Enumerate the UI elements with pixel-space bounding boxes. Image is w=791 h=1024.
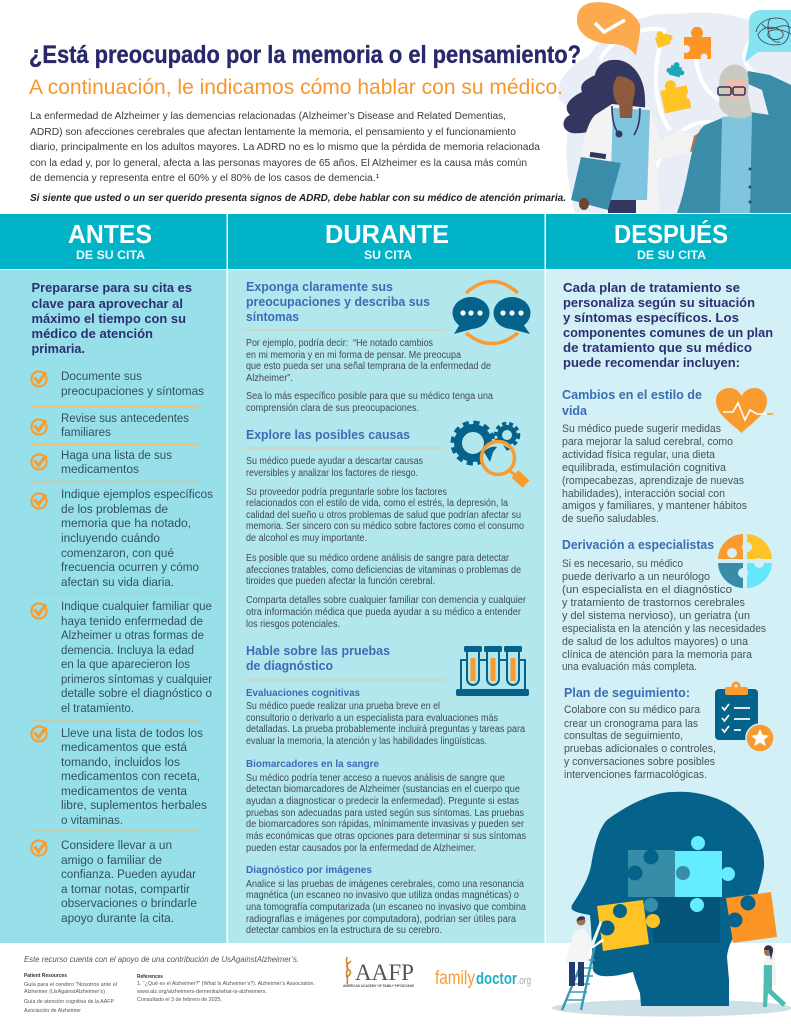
logo: familydoctor.org: .org	[517, 975, 531, 987]
section: pruebas de diagnostico: detectan biomarcadores de Alzheimer (sustancias en el cuerpo que	[246, 784, 520, 795]
section: cambios en el estilo de vida: equilibrada, estimulación cognitiva	[562, 462, 727, 474]
checklist item 4: comenzaron, con qué	[61, 546, 174, 560]
patient resources: Patient Resources	[24, 973, 67, 979]
icon: chat bubbles	[452, 282, 530, 344]
intro paragraph: diario, principalmente en los adultos mayores. La ADRD no es lo mismo que la pérdida de memoria relacionada	[30, 142, 540, 153]
heading: durante: SU CITA	[364, 248, 412, 262]
icon: heart with pulse	[716, 388, 773, 433]
section: explore: tiroides que pueden afectar la función cerebral.	[246, 576, 435, 587]
intro paragraph	[30, 111, 540, 184]
references: 1. “¿Qué es el Alzheimer?” (What Is Alzheimer’s?). Alzheimer’s Association.	[137, 981, 315, 987]
lead paragraph: médico de atención	[32, 326, 153, 341]
section: plan de seguimiento: consultas de seguimiento,	[564, 730, 683, 742]
heading: antes: ANTES	[68, 219, 152, 249]
section: explore: Explore las posibles causas	[246, 427, 410, 442]
checklist item 1	[31, 369, 204, 398]
section: exponga: comprensión clara de sus preocupaciones.	[246, 403, 419, 414]
patient resources: Asociación de Alzheimer	[24, 1008, 81, 1014]
call to action sentence: Si siente que usted o un ser querido presenta signos de ADRD, debe hablar con su médico de atención primaria.	[30, 193, 566, 204]
section: explore: reversibles y analizar los factores de riesgo.	[246, 468, 418, 479]
section: pruebas de diagnostico: radiografías e imágenes por computadora), podrían ser útiles para	[246, 914, 517, 925]
illustration: head with puzzle pieces	[552, 792, 791, 1016]
section: pruebas de diagnostico: de diagnóstico	[246, 658, 333, 673]
checklist item 7: observaciones o brindarle	[61, 896, 197, 910]
checklist item 3	[31, 448, 172, 476]
checklist item 5: Alzheimer u otras formas de	[61, 628, 204, 642]
checklist item 2: familiares	[61, 425, 111, 439]
checklist item 5: primeros síntomas y cualquier	[61, 672, 212, 686]
checklist item 4: Indique ejemplos específicos	[61, 487, 213, 501]
lead paragraph: máximo el tiempo con su	[32, 311, 186, 326]
section: plan de seguimiento: Plan de seguimiento:	[564, 685, 690, 700]
section: cambios en el estilo de vida	[562, 387, 747, 525]
section: cambios en el estilo de vida: amigos y familiares, y mantener hábitos	[562, 500, 747, 512]
section: explore: memoria. Ser sincero con su médico sobre factores como el consumo	[246, 521, 524, 532]
logo: AAFP	[343, 957, 415, 988]
section: cambios en el estilo de vida: Cambios en el estilo de	[562, 387, 702, 402]
panel: durante	[228, 214, 544, 943]
heading: despues: DE SU CITA	[637, 248, 706, 262]
intro paragraph: ADRD) son afecciones cerebrales que afectan lentamente la memoria, el pensamiento y el funcionamiento	[30, 127, 516, 138]
checklist item 3: medicamentos	[61, 462, 139, 476]
section: derivacion a especialistas: y del sistema nervioso), un geriatra (un	[562, 610, 750, 622]
references: www.alz.org/alzheimers-dementia/what-is-alzheimers.	[137, 989, 267, 995]
lead paragraph	[32, 280, 192, 356]
section: explore: Su médico puede ayudar a descartar causas	[246, 456, 423, 467]
section: exponga: preocupaciones y describa sus	[246, 294, 430, 309]
section: pruebas de diagnostico: Hable sobre las pruebas	[246, 643, 390, 658]
section: derivacion a especialistas: (un especialista en el diagnóstico	[562, 584, 732, 596]
checklist item 4: afectan su vida diaria.	[61, 575, 174, 589]
section: explore: Es posible que su médico ordene análisis de sangre para detectar	[246, 553, 510, 564]
checklist item 5: Indique cualquier familiar que	[61, 599, 212, 613]
section: pruebas de diagnostico: detectar cambios en la estructura de su cerebro.	[246, 925, 442, 936]
figure: doctor on ladder	[562, 916, 604, 1010]
puzzle piece: yellow	[597, 900, 660, 951]
patient resources: Guía para el cerebro “Nosotros ante el	[24, 982, 117, 988]
section: exponga: Sea lo más específico posible para que su médico tenga una	[246, 391, 494, 402]
checklist item 7: amigo o familiar de	[61, 853, 162, 867]
checklist item 5: haya tenido enfermedad de	[61, 614, 203, 628]
section: cambios en el estilo de vida: para mejorar la salud cerebral, como	[562, 436, 733, 448]
section: exponga: Por ejemplo, podría decir: “He notado cambios	[246, 338, 433, 349]
icon: puzzle circle	[718, 534, 772, 588]
section: exponga: Alzheimer”.	[246, 373, 293, 384]
section: derivacion a especialistas: una evaluación más completa.	[562, 661, 697, 673]
intro paragraph: de demencia y representa entre el 60% y el 80% de los casos de demencia.¹	[30, 173, 380, 184]
references: References	[137, 974, 163, 980]
section: cambios en el estilo de vida: (rompecabezas, aprendizaje de nuevas	[562, 475, 744, 487]
logo: AAFP: AAFP	[355, 960, 414, 985]
section: plan de seguimiento: crear un cronograma para las	[564, 718, 698, 730]
lead paragraph: y síntomas específicos. Los	[563, 310, 739, 325]
checklist item 3: Haga una lista de sus	[61, 448, 172, 462]
section: pruebas de diagnostico: una tomografía computarizada (un escaneo no invasivo que combina	[246, 902, 527, 913]
section: pruebas de diagnostico: Su médico puede realizar una prueba breve en el	[246, 701, 440, 712]
lead paragraph: Prepararse para su cita es	[32, 280, 192, 295]
title: ¿Está preocupado por la memoria o el pensamiento?	[29, 41, 581, 69]
logo: familydoctor.org	[435, 968, 531, 989]
checklist item 6: libre, suplementos herbales	[61, 798, 207, 812]
section: cambios en el estilo de vida: vida	[562, 403, 588, 418]
section: derivacion a especialistas	[562, 537, 766, 673]
checklist item 5: detalle sobre el diagnóstico o	[61, 686, 212, 700]
heading: antes	[68, 219, 152, 262]
section: explore: calidad del sueño u otros problemas de salud que podrían afectar su	[246, 510, 521, 521]
intro paragraph: La enfermedad de Alzheimer y las demencias relacionadas (Alzheimer’s Disease and Related Dementias,	[30, 111, 506, 122]
section: pruebas de diagnostico: de biomarcadores son rápidas, mínimamente invasivas y pueden ser	[246, 819, 525, 830]
section: exponga: Exponga claramente sus	[246, 279, 393, 294]
lead paragraph: personaliza según su situación	[563, 295, 755, 310]
doctor figure	[564, 60, 700, 213]
checklist item 2	[31, 411, 189, 439]
lead paragraph: componentes comunes de un plan	[563, 325, 773, 340]
section: cambios en el estilo de vida: habilidades), interacción social con	[562, 488, 725, 500]
section: cambios en el estilo de vida: de sueño saludables.	[562, 513, 659, 525]
checklist item 5: en la que aparecieron los	[61, 657, 190, 671]
panel: despues	[546, 214, 791, 943]
section: plan de seguimiento	[564, 685, 716, 781]
checklist item 1: preocupaciones y síntomas	[61, 384, 204, 398]
section: pruebas de diagnostico: detalladas. La prueba probablemente incluirá preguntas y tareas para	[246, 724, 526, 735]
panel: antes	[0, 214, 226, 943]
checklist item 7: Considere llevar a un	[61, 838, 172, 852]
section: cambios en el estilo de vida: actividad física regular, una dieta	[562, 449, 716, 461]
puzzle pieces floating	[653, 27, 711, 113]
checklist item 6: o vitaminas.	[61, 813, 123, 827]
checklist item 6: medicamentos que está	[61, 740, 187, 754]
section: plan de seguimiento: Colabore con su médico para	[564, 704, 701, 716]
patient figure	[677, 64, 791, 213]
section: pruebas de diagnostico: pruebas son adecuadas para usted según sus síntomas. Las pruebas	[246, 808, 524, 819]
checklist item 2: Revise sus antecedentes	[61, 411, 189, 425]
section: explore: Su proveedor podría preguntarle sobre los factores	[246, 487, 447, 498]
lead paragraph	[563, 280, 773, 370]
section: explore: otra información médica que pueda ayudar a su médico a entender	[246, 607, 522, 618]
heading: antes: DE SU CITA	[76, 248, 145, 262]
section: explore	[243, 427, 527, 630]
speech bubble: check	[577, 2, 640, 56]
section: pruebas de diagnostico: Analice si las pruebas de imágenes cerebrales, como una resonancia	[246, 879, 525, 890]
illustration: doctor and patient with brain backdrop	[558, 2, 791, 213]
puzzle piece: teal	[628, 850, 675, 912]
heading: despues	[614, 219, 728, 262]
patient resources	[24, 973, 117, 1014]
puzzle piece: orange	[726, 892, 777, 943]
section: pruebas de diagnostico: Diagnóstico por imágenes	[246, 865, 372, 876]
section: pruebas de diagnostico: Su médico podría tener acceso a nuevos análisis de sangre que	[246, 773, 505, 784]
section: explore: de alcohol es muy importante.	[246, 533, 367, 544]
lead paragraph: Cada plan de tratamiento se	[563, 280, 740, 295]
section: derivacion a especialistas: Si es necesario, su médico	[562, 558, 683, 570]
footer support line: Este recurso cuenta con el apoyo de una contribución de UsAgainstAlzheimer’s.	[24, 955, 299, 964]
section: explore: Comparta detalles sobre cualquier familiar con demencia y cualquier	[246, 595, 527, 606]
section: explore: relacionados con el estilo de vida, como el estrés, la depresión, la	[246, 498, 509, 509]
section: cambios en el estilo de vida: Su médico puede sugerir medidas	[562, 423, 721, 435]
section: exponga: síntomas	[246, 309, 299, 324]
references	[137, 974, 315, 1003]
section: pruebas de diagnostico: consultorio o derivarlo a un especialista para evaluaciones más	[246, 713, 498, 724]
lead paragraph: puede recomendar incluyen:	[563, 355, 740, 370]
checklist item 5	[31, 599, 212, 715]
speech bubble: scribble	[745, 10, 791, 62]
heading: despues: DESPUÉS	[614, 219, 728, 249]
checklist item 4: incluyendo cuándo	[61, 531, 160, 545]
section: derivacion a especialistas: de salud de los adultos mayores) o una	[562, 636, 749, 648]
checklist item 4: memoria que ha notado,	[61, 516, 191, 530]
section: pruebas de diagnostico: pueden estar causados por la enfermedad de Alzheimer.	[246, 843, 476, 854]
patient resources: Guía de atención cognitiva de la AAFP	[24, 999, 115, 1005]
icon: clipboard with star	[715, 682, 774, 752]
checklist item 6: tomando, incluidos los	[61, 755, 180, 769]
patient resources: Alzheimer (UsAgainstAlzheimer’s)	[24, 989, 105, 995]
icon: test tubes	[456, 646, 529, 696]
section: pruebas de diagnostico: Evaluaciones cognitivas	[246, 688, 360, 699]
checklist item 7	[31, 838, 197, 925]
puzzle piece: cyan	[675, 836, 735, 912]
logo: familydoctor.org: family	[435, 968, 475, 989]
section: derivacion a especialistas: y tratamiento de trastornos cerebrales	[562, 597, 745, 609]
checklist item 4: frecuencia ocurren y cómo	[61, 560, 199, 574]
checklist item 5: el tratamiento.	[61, 701, 134, 715]
checklist item 7: apoyo durante la cita.	[61, 911, 174, 925]
section: plan de seguimiento: pruebas adicionales o controles,	[564, 743, 716, 755]
checklist item 7: a tomar notas, compartir	[61, 882, 190, 896]
section: pruebas de diagnostico: más económicas que otras opciones para determinar si sus síntomas	[246, 831, 526, 842]
heading: durante: DURANTE	[325, 219, 449, 249]
section: explore: afecciones tratables, como deficiencias de vitaminas o problemas de	[246, 565, 521, 576]
checklist item 6: medicamentos de venta	[61, 784, 187, 798]
icon: gears and magnifier	[453, 423, 526, 484]
figure: doctor holding puzzle piece	[762, 944, 786, 1007]
checklist item 4	[31, 487, 213, 589]
logo: AAFP: AMERICAN ACADEMY OF FAMILY PHYSICIANS	[343, 984, 415, 988]
checklist item 1: Documente sus	[61, 369, 142, 383]
section: derivacion a especialistas: clínica de atención para la memoria para	[562, 649, 753, 661]
lead paragraph: clave para aprovechar al	[32, 296, 183, 311]
logo: familydoctor.org: doctor	[476, 969, 517, 988]
section: pruebas de diagnostico: ayudan a diagnosticar o predecir la enfermedad). Pregunte si estas	[246, 796, 519, 807]
section: explore: los riesgos potenciales.	[246, 619, 340, 630]
checklist item 7: confianza. Pueden ayudar	[61, 867, 196, 881]
checklist item 4: de los problemas de	[61, 502, 168, 516]
section: pruebas de diagnostico: Biomarcadores en la sangre	[246, 759, 379, 770]
subtitle: A continuación, le indicamos cómo hablar con su médico.	[29, 75, 563, 99]
checklist item 6: medicamentos con receta,	[61, 769, 200, 783]
section: pruebas de diagnostico: evaluar la memoria, la atención y las habilidades lingüísticas.	[246, 736, 487, 747]
section: derivacion a especialistas: especialista en la atención y las necesidades	[562, 623, 766, 635]
section: pruebas de diagnostico	[245, 643, 527, 936]
checklist item 6: Lleve una lista de todos los	[61, 726, 203, 740]
section: exponga: que esto pueda ser una señal temprana de la enfermedad de	[246, 361, 491, 372]
section: exponga: en mi memoria y en mi forma de pensar. Me preocupa	[246, 350, 462, 361]
checklist item 6	[31, 726, 207, 827]
heading: durante	[325, 219, 449, 262]
references: Consultado el 3 de febrero de 2025.	[137, 997, 222, 1003]
intro paragraph: con la edad y, por lo general, afecta a las personas mayores de 65 años. El Alzheimer es la causa más común	[30, 158, 527, 169]
checklist item 5: demencia. Incluya la edad	[61, 643, 194, 657]
section: derivacion a especialistas: puede derivarlo a un neurólogo	[562, 571, 710, 583]
section: plan de seguimiento: y conversaciones sobre posibles	[564, 756, 715, 768]
section: exponga	[243, 279, 494, 414]
section: plan de seguimiento: intervenciones farmacológicas.	[564, 769, 707, 781]
section: derivacion a especialistas: Derivación a especialistas	[562, 537, 714, 552]
section: pruebas de diagnostico: magnética (un escaneo no invasivo que utiliza ondas magnéticas) o	[246, 890, 519, 901]
lead paragraph: de tratamiento que su médico	[563, 340, 752, 355]
lead paragraph: primaria.	[32, 341, 85, 356]
